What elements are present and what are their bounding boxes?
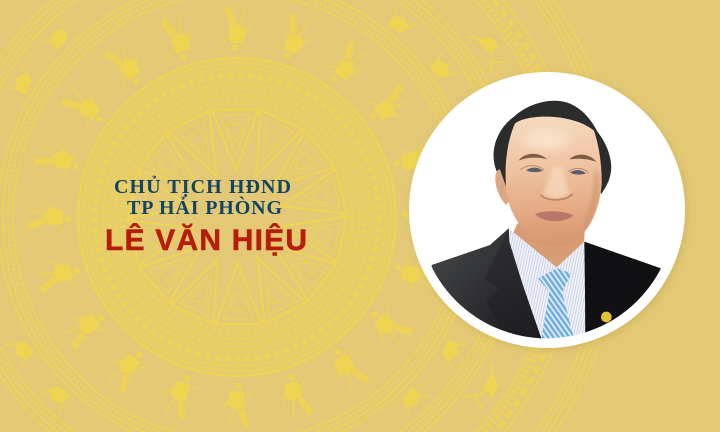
lapel pin <box>601 312 612 322</box>
suit right <box>584 242 661 332</box>
nose <box>544 167 569 198</box>
inner disc with rings <box>78 58 396 376</box>
shirt <box>509 228 587 343</box>
title line 1: CHỦ TỊCH HĐND <box>114 175 291 198</box>
face <box>506 117 602 247</box>
figure ring: small motifs <box>6 6 468 417</box>
name: LÊ VĂN HIỆU <box>105 223 307 257</box>
suit left <box>432 228 542 347</box>
portrait circle shadow <box>411 74 687 350</box>
left lapel <box>485 228 542 339</box>
eye creases <box>521 166 589 173</box>
mouth <box>535 211 573 221</box>
figure ring: birds <box>465 26 508 410</box>
title line 2: TP HẢI PHÒNG <box>127 195 282 219</box>
hair <box>494 101 611 194</box>
nose shadow <box>541 194 573 200</box>
cheek shadow <box>580 167 600 237</box>
tie <box>538 268 573 339</box>
forehead highlight <box>523 130 570 150</box>
portrait photo <box>432 101 661 347</box>
portrait white circle <box>409 72 685 348</box>
neck <box>514 223 585 268</box>
brows <box>518 154 597 162</box>
eyes <box>526 168 586 175</box>
star triangles <box>126 108 348 326</box>
ear <box>495 169 511 205</box>
figure ring: warriors <box>26 6 448 428</box>
